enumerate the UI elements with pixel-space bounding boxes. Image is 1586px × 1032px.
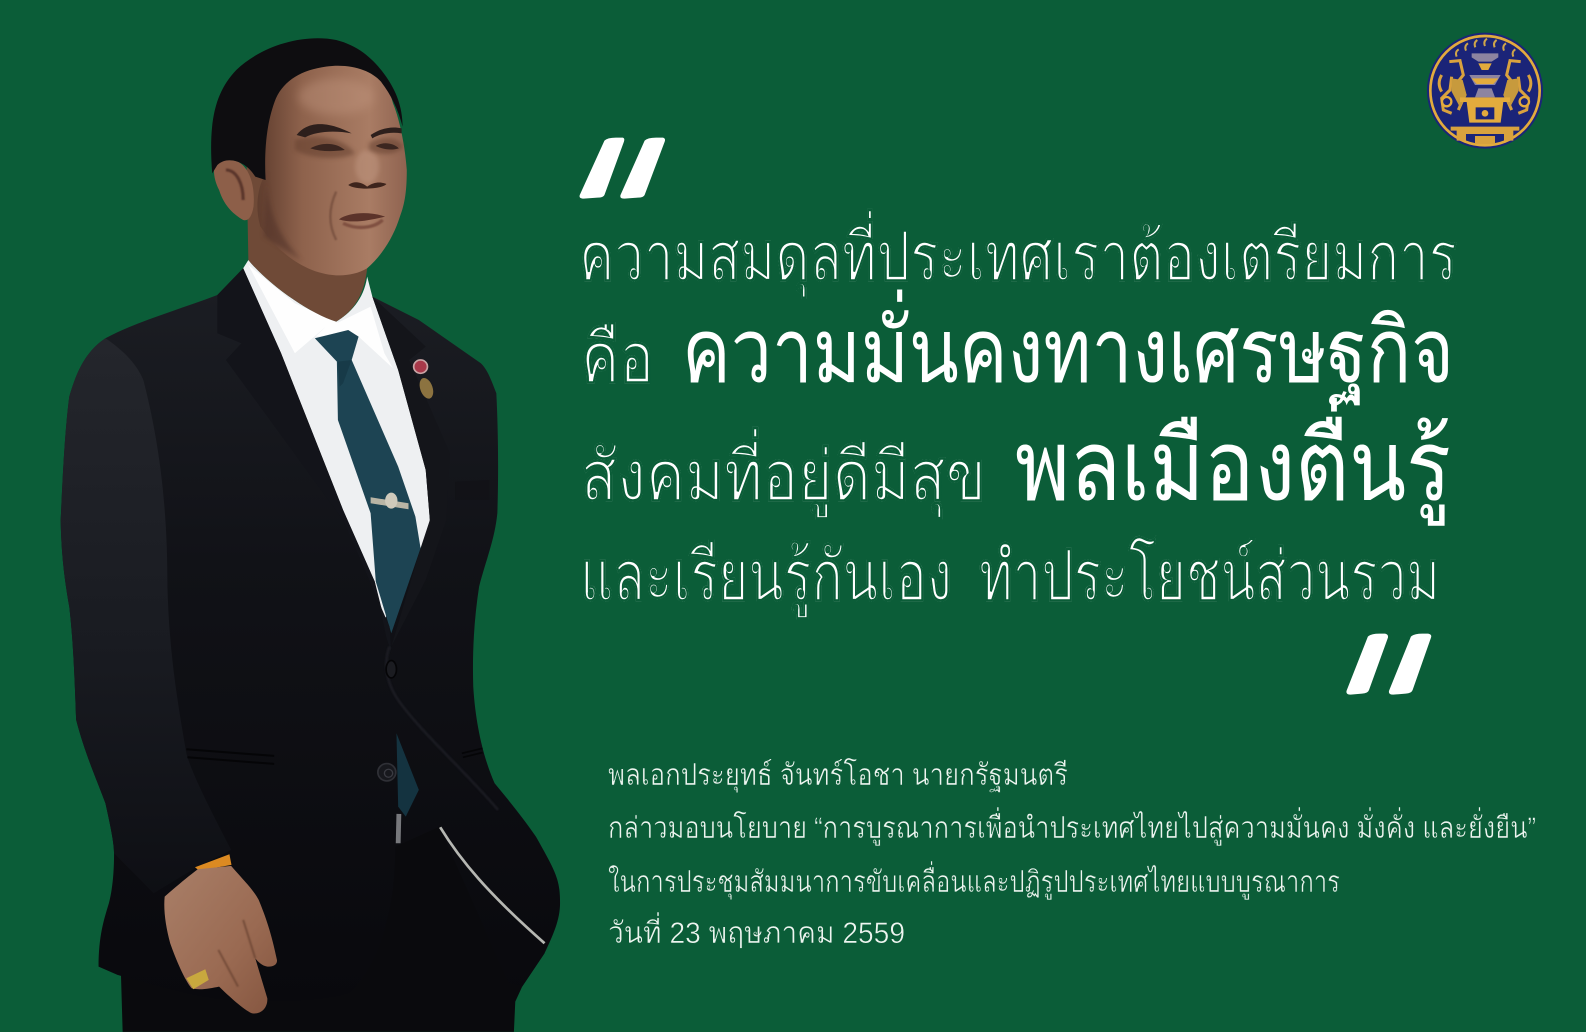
lower button	[378, 764, 396, 781]
side pocket	[462, 748, 483, 757]
seal bowl gold	[1472, 63, 1498, 84]
tie bar	[371, 493, 409, 509]
seal base tiers	[1451, 127, 1519, 144]
white shirt	[243, 260, 430, 620]
seal bowl on pedestal	[1469, 53, 1501, 97]
left eye	[310, 144, 345, 151]
finger creases	[218, 920, 255, 987]
seal flame crown	[1456, 39, 1515, 57]
mouth	[339, 213, 385, 221]
ear	[214, 160, 254, 220]
wristband	[195, 854, 231, 871]
forehead highlight	[298, 78, 374, 115]
smile line	[330, 192, 336, 240]
lapel pin: red	[414, 360, 427, 373]
seal lion wheels	[1442, 97, 1529, 106]
lip highlight	[343, 220, 383, 227]
jaw shading	[264, 170, 302, 260]
nose highlight	[355, 150, 379, 183]
inner ear shading	[226, 170, 243, 200]
right eye	[376, 143, 399, 149]
quote line 2 lead word: คือ	[581, 319, 654, 397]
hair	[211, 38, 403, 180]
closing quotation mark	[1346, 634, 1431, 695]
seal right lion	[1505, 61, 1531, 113]
shirt collar highlight	[248, 265, 393, 368]
seal left lion	[1439, 61, 1465, 113]
metal zip pull	[391, 814, 406, 843]
hand	[164, 866, 277, 1013]
right lapel	[372, 297, 450, 647]
headline quote	[579, 208, 1457, 620]
necktie	[315, 330, 421, 633]
chest pocket	[455, 480, 489, 500]
eye socket shadow	[295, 137, 403, 158]
quote line 4 left: และเรียนรู้กันเอง	[580, 537, 952, 620]
lapel pin: gold	[417, 376, 436, 400]
left lapel	[217, 268, 391, 653]
opening quotation mark	[580, 138, 665, 199]
seal throne panel	[1482, 110, 1488, 117]
gold ring	[186, 969, 209, 989]
trousers	[121, 820, 545, 1032]
jacket front edge	[386, 647, 498, 810]
lower necktie	[396, 733, 419, 817]
right eyebrow	[371, 127, 402, 138]
tie knot shading	[338, 360, 352, 387]
portrait: man in dark suit walking	[61, 38, 560, 1032]
quote line 3: สังคมที่อยู่ดีมีสุข	[581, 426, 986, 520]
silver jacket lining edge	[440, 827, 545, 943]
left sleeve	[61, 338, 231, 893]
upper button	[386, 661, 396, 678]
nose	[348, 182, 386, 189]
seal left lion body fill	[1452, 78, 1467, 107]
face	[257, 57, 407, 275]
quote line 3 emphasis: informed citizens: พลเมืองตื่นรู้	[1015, 398, 1451, 526]
hip pocket	[186, 749, 274, 764]
seal right lion body fill	[1503, 78, 1518, 107]
neck	[247, 167, 367, 322]
date: วันที่ 23 พฤษภาคม 2559	[608, 912, 905, 950]
government seal logo	[1427, 33, 1543, 149]
attribution text	[608, 757, 1536, 950]
seal throne	[1460, 97, 1510, 123]
jacket body	[61, 268, 560, 1002]
event name: ในการประชุมสัมมนาการขับเคลื่อนและปฏิรูปประเทศไทยแบบบูรณาการ	[608, 861, 1340, 901]
left eyebrow	[297, 124, 352, 137]
seal gold ring	[1430, 36, 1540, 145]
seal disc	[1427, 33, 1543, 149]
speaker name: พลเอกประยุทธ์ จันทร์โอชา นายกรัฐมนตรี	[608, 757, 1068, 794]
